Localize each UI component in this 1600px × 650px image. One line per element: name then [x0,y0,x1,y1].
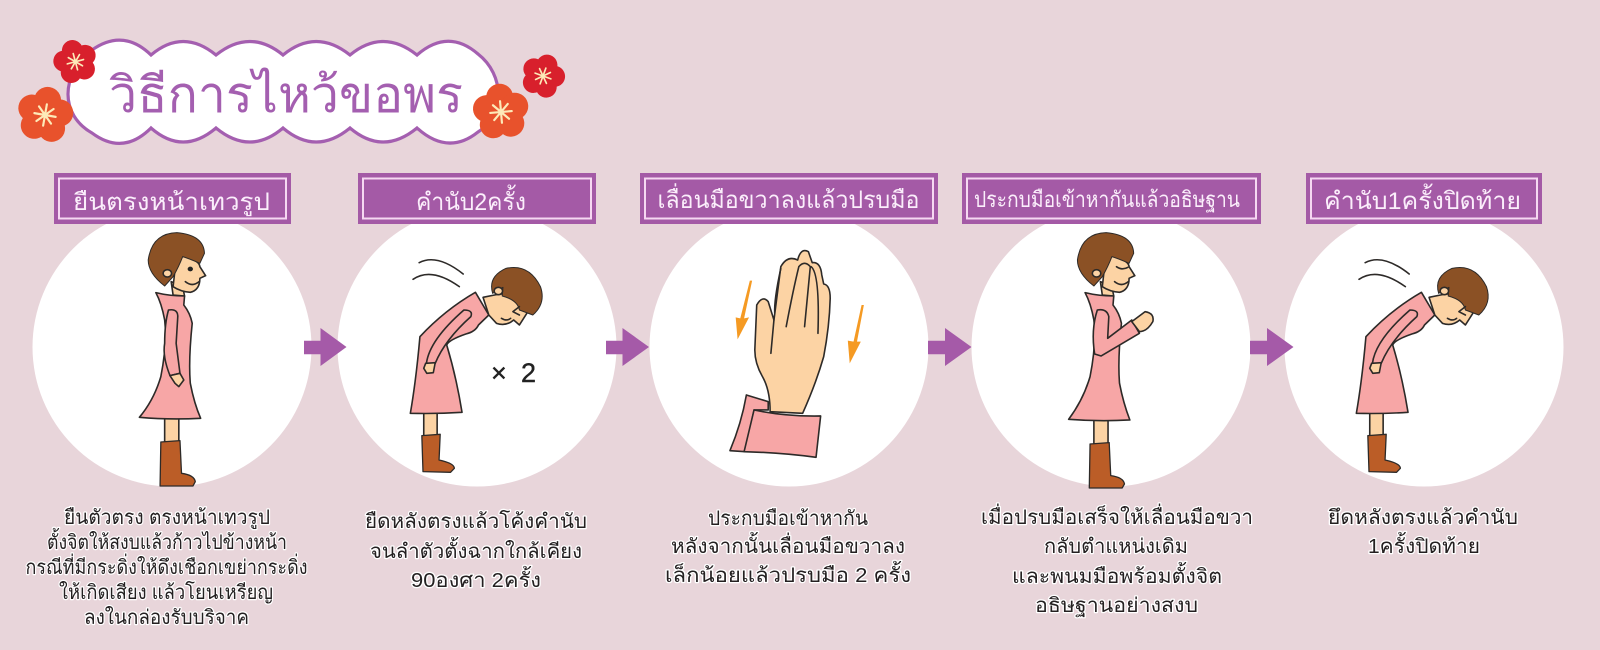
icon: orange down arrow right [848,305,864,363]
text block: step 5 description: ยึดหลังตรงแล้วคำนับ [1328,507,1518,529]
icon: orange plum blossom bottom left [13,82,77,145]
panel: step 5 heading: คำนับ1ครั้งปิดท้าย [1324,183,1521,215]
text block: step 3 description: ประกบมือเข้าหากัน [708,508,868,530]
icon: red plum blossom top right [516,48,571,102]
panel: step 1 heading [54,173,291,224]
text block: step 5 description [1328,507,1518,558]
icon: orange plum blossom bottom right [471,81,531,140]
circle: step 4 [972,208,1250,486]
arrow: step 1 to 2 [304,328,346,366]
arrow: step 3 to 4 [928,328,972,366]
text block: step 4 description: กลับตำแหน่งเดิม [1044,536,1188,558]
panel: step 2 heading: คำนับ2ครั้ง [416,184,526,216]
illustration: person bowing once [1356,260,1488,472]
icon: red plum blossom top left [49,35,101,86]
panel: step 3 heading: เลื่อนมือขวาลงแล้วปรบมือ [658,183,920,214]
text block: step 1 description [26,507,308,629]
illustration: person bowing twice [410,260,542,472]
circle: step 1 [32,208,312,486]
illustration: hands clapping [730,251,864,457]
panel: step 4 heading [962,173,1261,224]
text block: step 2 description: ยืดหลังตรงแล้วโค้งคำนับ [365,510,587,533]
text block: step 4 description: อธิษฐานอย่างสงบ [1035,595,1198,617]
text block: step 2 description: 90องศา 2ครั้ง [411,566,541,592]
text block: step 4 description: และพนมมือพร้อมตั้งจิต [1012,562,1222,588]
text block: step 3 description [665,508,911,587]
title cloud shape [68,40,498,143]
text block: step 1 description: ให้เกิดเสียง แล้วโยนเหรียญ [59,581,273,604]
icon: orange down arrow left [736,281,752,339]
circle: step 2 [338,208,616,486]
text block: step 4 description: เมื่อปรบมือเสร็จให้เลื่อนมือขวา [981,503,1253,529]
text block: step 5 description: 1ครั้งปิดท้าย [1368,532,1480,558]
text block: step 1 description: ตั้งจิตให้สงบแล้วก้าวไปข้างหน้า [47,528,287,554]
text block: step 3 description: หลังจากนั้นเลื่อนมือขวาลง [671,532,905,558]
text block: step 2 description [365,510,587,592]
text block: step 4 description [981,503,1253,617]
panel: step 5 heading [1306,173,1542,224]
circle: step 5 [1284,208,1564,486]
title: วิธีการไหว้ขอพร [109,67,463,123]
text block: step 1 description: กรณีที่มีกระดิ่งให้ดึงเชือกเขย่ากระดิ่ง [26,553,308,579]
illustration: person standing straight [139,233,206,486]
arrow: step 2 to 3 [606,328,649,366]
text block: step 1 description: ยืนตัวตรง ตรงหน้าเทวรูป [64,507,270,530]
text block: step 3 description: เล็กน้อยแล้วปรบมือ 2 ครั้ง [665,561,911,587]
title banner [13,35,571,145]
text: times two: × 2 [491,358,536,388]
arrow: step 4 to 5 [1250,328,1294,366]
panel: step 3 heading [640,173,938,224]
illustration: person praying [1069,233,1153,488]
panel: step 1 heading: ยืนตรงหน้าเทวรูป [73,189,270,217]
text block: step 2 description: จนลำตัวตั้งฉากใกล้เคียง [370,537,582,563]
text block: step 1 description: ลงในกล่องรับบริจาค [84,606,249,629]
panel: step 2 heading [358,173,596,224]
circle: step 3 [650,208,928,486]
panel: step 4 heading: ประกบมือเข้าหากันแล้วอธิษฐาน [974,187,1240,213]
